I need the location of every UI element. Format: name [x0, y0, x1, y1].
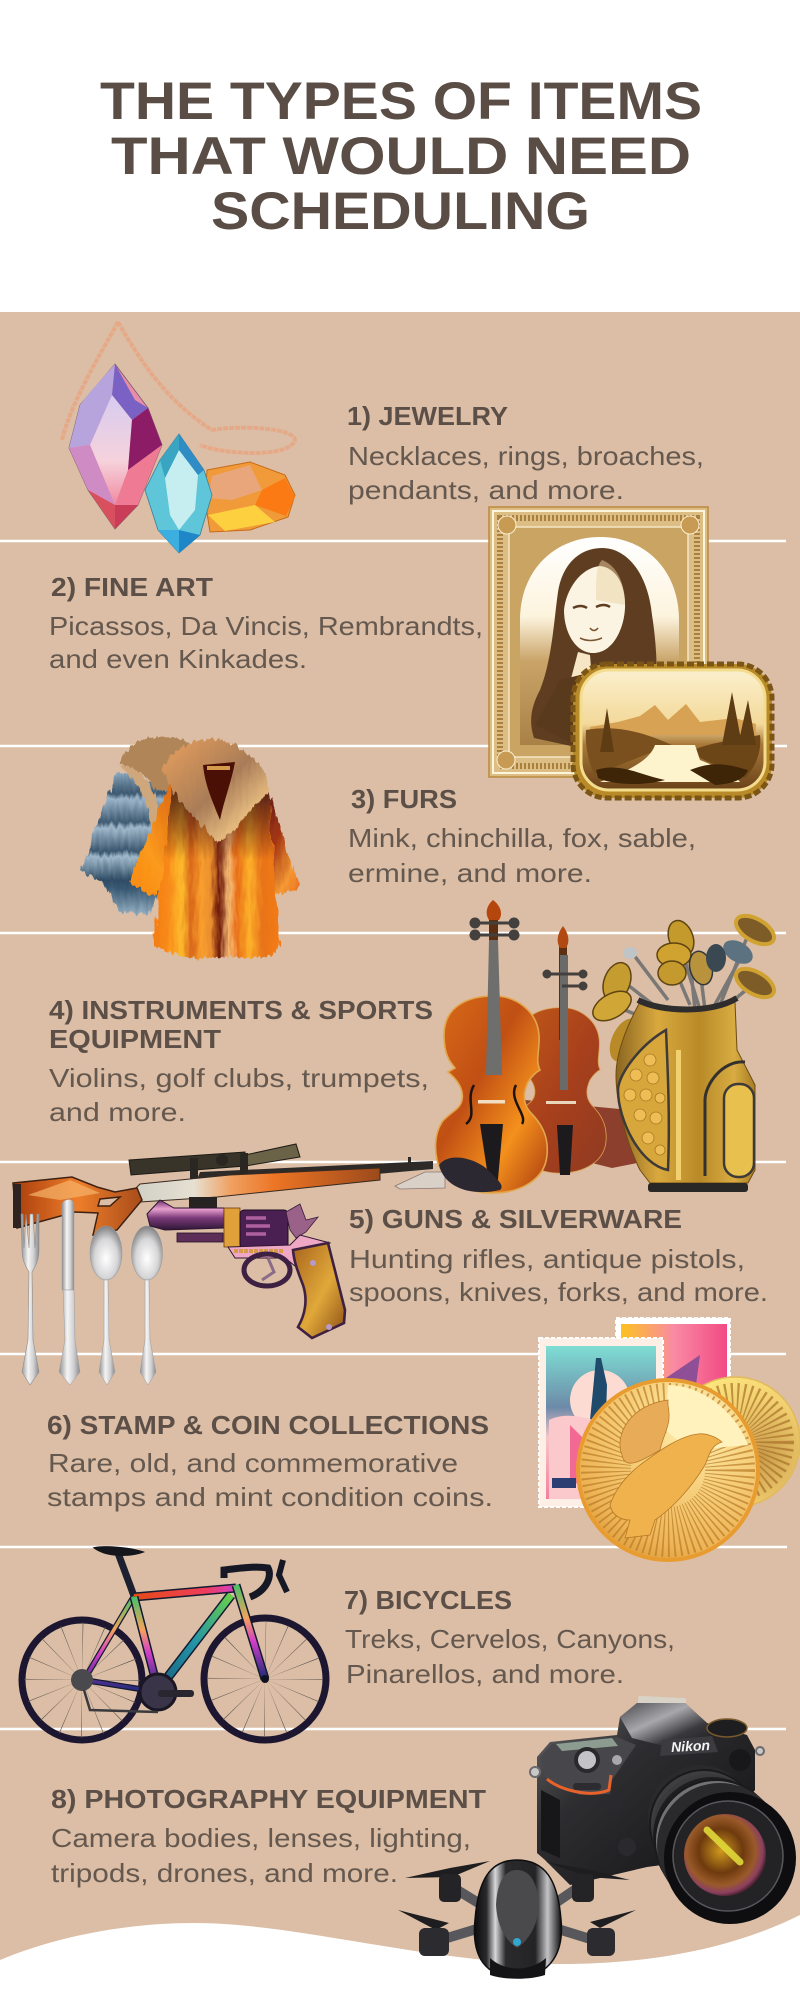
- title: SCHEDULING: [211, 182, 590, 241]
- panel: photography equipment: [51, 1696, 796, 1979]
- icon: violins and golf bag: [395, 900, 779, 1193]
- description: Picassos, Da Vincis, Rembrandts,: [49, 611, 483, 641]
- icon: revolver: [147, 1200, 345, 1338]
- description: spoons, knives, forks, and more.: [349, 1277, 768, 1307]
- heading: 5) GUNS & SILVERWARE: [349, 1204, 682, 1234]
- icon: stamps: [539, 1318, 730, 1507]
- lens: [648, 1765, 796, 1924]
- panel: stamp and coin collections: [47, 1318, 800, 1560]
- description: [345, 1624, 675, 1689]
- heading: [49, 995, 433, 1054]
- rear wheel: [22, 1620, 142, 1740]
- logo plate: Nikon: [671, 1737, 710, 1755]
- heading: 3) FURS: [351, 784, 457, 814]
- description: Mink, chinchilla, fox, sable,: [348, 823, 696, 853]
- description: ermine, and more.: [348, 858, 592, 888]
- description: [47, 1448, 493, 1512]
- golf bag: [603, 998, 755, 1192]
- icon: landscape in ornate frame: [573, 664, 772, 798]
- icon: gems and chain: [62, 322, 295, 553]
- icon: silverware: [21, 1199, 162, 1385]
- logo plate: [660, 1736, 718, 1756]
- panel: fine art: [49, 507, 772, 798]
- icon: bicycle: [22, 1547, 326, 1740]
- panel: guns and silverware: [13, 1144, 768, 1385]
- heading: 4) INSTRUMENTS & SPORTS: [49, 995, 433, 1025]
- description: Camera bodies, lenses, lighting,: [51, 1823, 471, 1853]
- heading: 2) FINE ART: [51, 572, 213, 602]
- icon: rifle: [13, 1144, 433, 1235]
- sheet and case behind the violins: [395, 1100, 642, 1189]
- description: Pinarellos, and more.: [346, 1659, 624, 1689]
- first violin: [436, 900, 547, 1193]
- description: [49, 611, 483, 674]
- description: pendants, and more.: [348, 475, 624, 505]
- title: THE TYPES OF ITEMS: [100, 72, 702, 131]
- description: Violins, golf clubs, trumpets,: [49, 1063, 429, 1093]
- description: Hunting rifles, antique pistols,: [349, 1244, 745, 1274]
- title: [100, 72, 702, 241]
- golf clubs: [588, 910, 779, 1027]
- second violin: [512, 926, 606, 1175]
- description: and even Kinkades.: [49, 644, 307, 674]
- panel: jewelry: [62, 322, 704, 553]
- heading: 8) PHOTOGRAPHY EQUIPMENT: [51, 1784, 486, 1814]
- description: and more.: [49, 1097, 186, 1127]
- panel: instruments and sports equipment: [49, 995, 433, 1127]
- description: [348, 823, 696, 888]
- description: [51, 1823, 471, 1888]
- panel: furs: [80, 737, 696, 959]
- description: [49, 1063, 429, 1127]
- description: tripods, drones, and more.: [51, 1858, 398, 1888]
- description: [348, 441, 704, 505]
- description: Necklaces, rings, broaches,: [348, 441, 704, 471]
- icon: drone: [398, 1860, 636, 1979]
- icon: portrait in gold frame: [489, 507, 708, 777]
- title: THAT WOULD NEED: [111, 127, 691, 186]
- icon: coins: [578, 1377, 800, 1560]
- heading: EQUIPMENT: [49, 1024, 221, 1054]
- description: Rare, old, and commemorative: [48, 1448, 458, 1478]
- description: Treks, Cervelos, Canyons,: [345, 1624, 675, 1654]
- heading: 6) STAMP & COIN COLLECTIONS: [47, 1410, 489, 1440]
- icon: camera: [530, 1696, 796, 1924]
- heading: 7) BICYCLES: [344, 1585, 512, 1615]
- heading: 1) JEWELRY: [347, 401, 508, 431]
- icon: fur coats: [80, 737, 300, 959]
- description: stamps and mint condition coins.: [47, 1482, 493, 1512]
- description: [349, 1244, 768, 1307]
- front wheel: [204, 1618, 326, 1740]
- panel: bicycles: [22, 1547, 675, 1740]
